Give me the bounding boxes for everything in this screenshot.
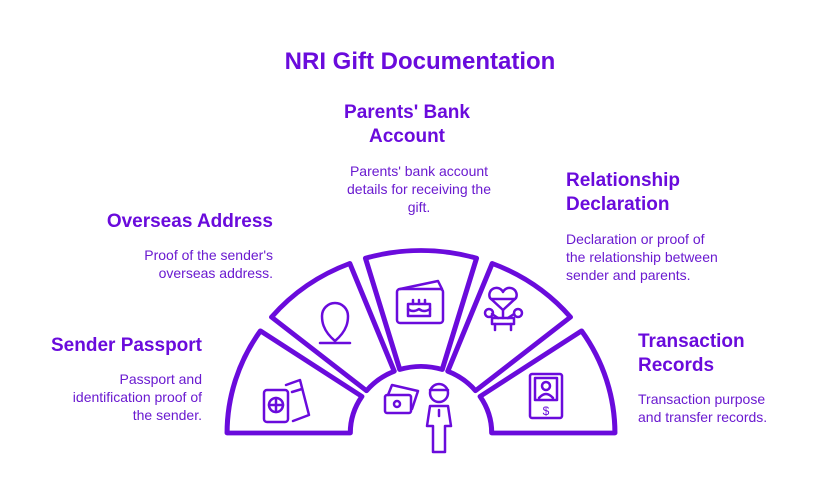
heading: transaction records: Records: [638, 355, 714, 376]
text: relationship declaration: sender and parents.: [566, 267, 691, 283]
heading: transaction records: [638, 331, 745, 376]
segment: overseas address: [272, 263, 394, 391]
heading: relationship declaration: Declaration: [566, 194, 669, 215]
text: overseas address: [144, 247, 273, 281]
segment: transaction records: [480, 331, 615, 433]
icon: location pin: [320, 303, 350, 343]
heading: parents' bank account: Account: [369, 126, 445, 147]
heading: parents' bank account: Parents' Bank: [344, 102, 470, 123]
heading: relationship declaration: [566, 170, 680, 215]
heading: overseas address: Overseas Address: [107, 211, 273, 232]
icon: transaction record: $: [543, 404, 550, 418]
text: overseas address: overseas address.: [159, 265, 273, 281]
heading: transaction records: Transaction: [638, 331, 745, 352]
text: parents' bank account: [347, 163, 491, 215]
text: parents' bank account: gift.: [408, 199, 430, 215]
text: parents' bank account: Parents' bank account: [350, 163, 488, 179]
text: relationship declaration: [566, 231, 718, 283]
text: sender passport: the sender.: [133, 407, 202, 423]
text: parents' bank account: details for receiving the: [347, 181, 491, 197]
text: overseas address: Proof of the sender's: [144, 247, 273, 263]
icon: card with cake: [397, 281, 443, 323]
text: sender passport: identification proof of: [73, 389, 202, 405]
text: transaction records: Transaction purpose: [638, 391, 765, 407]
segment: sender passport: [227, 331, 362, 433]
text: relationship declaration: the relationship between: [566, 249, 718, 265]
heading: relationship declaration: Relationship: [566, 170, 680, 191]
icon: passport: [264, 380, 309, 422]
icon: heart flowers: [485, 288, 522, 330]
title: NRI Gift Documentation: [285, 48, 555, 75]
text: transaction records: [638, 391, 767, 425]
icon: transaction record: [530, 374, 562, 418]
segment: relationship declaration: [448, 263, 570, 391]
text: relationship declaration: Declaration or proof of: [566, 231, 705, 247]
text: sender passport: Passport and: [120, 371, 202, 387]
heading: parents' bank account: [344, 102, 470, 147]
text: transaction records: and transfer records.: [638, 409, 767, 425]
icon: person with money: [385, 384, 451, 452]
heading: sender passport: Sender Passport: [51, 335, 202, 356]
text: sender passport: [73, 371, 202, 423]
segment: parents' bank account: [365, 251, 477, 370]
